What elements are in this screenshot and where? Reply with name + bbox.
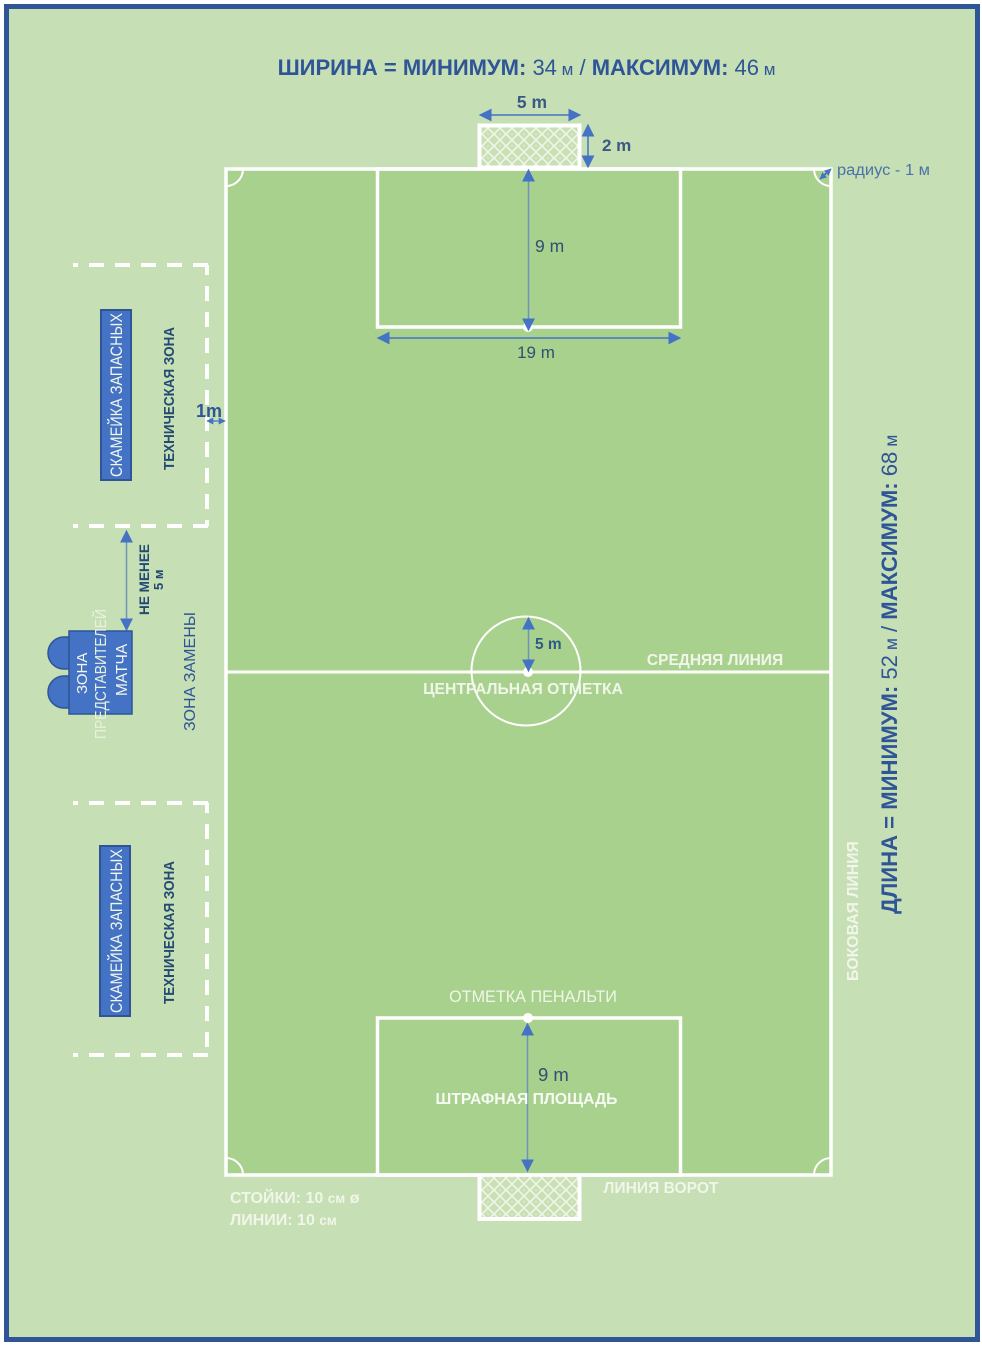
top goal xyxy=(480,126,580,168)
1 m offset: 1m xyxy=(196,401,222,421)
centre circle radius arrow: 5 m xyxy=(535,636,562,653)
goal line label: ЛИНИЯ ВОРОТ xyxy=(603,1180,719,1197)
length heading: ДЛИНА = МИНИМУМ: 52 м / МАКСИМУМ: 68 м xyxy=(877,435,902,914)
halfway line xyxy=(226,670,831,674)
goal height arrow xyxy=(588,125,631,167)
substitution zone label: ЗОНА ЗАМЕНЫ xyxy=(182,612,199,731)
technical zone label top: ТЕХНИЧЕСКАЯ ЗОНА xyxy=(162,327,178,470)
bench bottom: СКАМЕЙКА ЗАПАСНЫХ xyxy=(107,849,126,1013)
goal width arrow xyxy=(480,92,580,115)
technical zone top xyxy=(73,265,208,526)
penalty mark bottom xyxy=(523,1013,533,1023)
match officials zone: ЗОНА xyxy=(74,653,91,694)
centre mark label: ЦЕНТРАЛЬНАЯ ОТМЕТКА xyxy=(423,681,623,698)
penalty area label: ШТРАФНАЯ ПЛОЩАДЬ xyxy=(436,1091,617,1108)
penalty width arrow: 19 m xyxy=(517,343,555,362)
centre mark xyxy=(523,667,533,677)
top penalty depth arrow: 9 m xyxy=(535,236,564,256)
bench bottom xyxy=(100,846,130,1016)
pitch xyxy=(226,169,831,1175)
bottom penalty area xyxy=(378,1018,680,1175)
midline label: СРЕДНЯЯ ЛИНИЯ xyxy=(647,652,783,669)
technical zone label bottom: ТЕХНИЧЕСКАЯ ЗОНА xyxy=(162,861,178,1004)
5 m minimum arrow xyxy=(126,531,166,630)
match officials zone xyxy=(48,609,132,739)
centre circle radius arrow xyxy=(528,618,562,671)
centre circle xyxy=(472,616,580,726)
bottom goal xyxy=(480,1177,580,1219)
penalty mark top xyxy=(523,322,533,332)
penalty mark label: ОТМЕТКА ПЕНАЛЬТИ xyxy=(449,988,617,1006)
match officials zone: ПРЕДСТАВИТЕЛЕЙ xyxy=(92,609,110,739)
technical zone bottom xyxy=(73,803,208,1055)
corner arcs xyxy=(226,169,831,1175)
bottom penalty depth arrow: 9 m xyxy=(538,1064,569,1085)
posts and lines note: СТОЙКИ: 10 см ø xyxy=(230,1188,360,1207)
posts and lines note xyxy=(230,1188,360,1229)
width heading: ШИРИНА = МИНИМУМ: 34 м / МАКСИМУМ: 46 м xyxy=(278,55,775,80)
bench top xyxy=(101,310,131,480)
5 m minimum arrow: 5 м xyxy=(151,570,166,590)
corner radius label: радиус - 1 м xyxy=(837,162,930,179)
bench top: СКАМЕЙКА ЗАПАСНЫХ xyxy=(107,313,126,477)
touchline label: БОКОВАЯ ЛИНИЯ xyxy=(845,841,862,981)
posts and lines note: ЛИНИИ: 10 см xyxy=(230,1212,337,1229)
top penalty area xyxy=(378,169,680,327)
match officials zone: МАТЧА xyxy=(114,643,131,696)
5 m minimum arrow: НЕ МЕНЕЕ xyxy=(137,544,152,615)
goal height arrow: 2 m xyxy=(602,136,631,155)
goal width arrow: 5 m xyxy=(517,92,547,112)
